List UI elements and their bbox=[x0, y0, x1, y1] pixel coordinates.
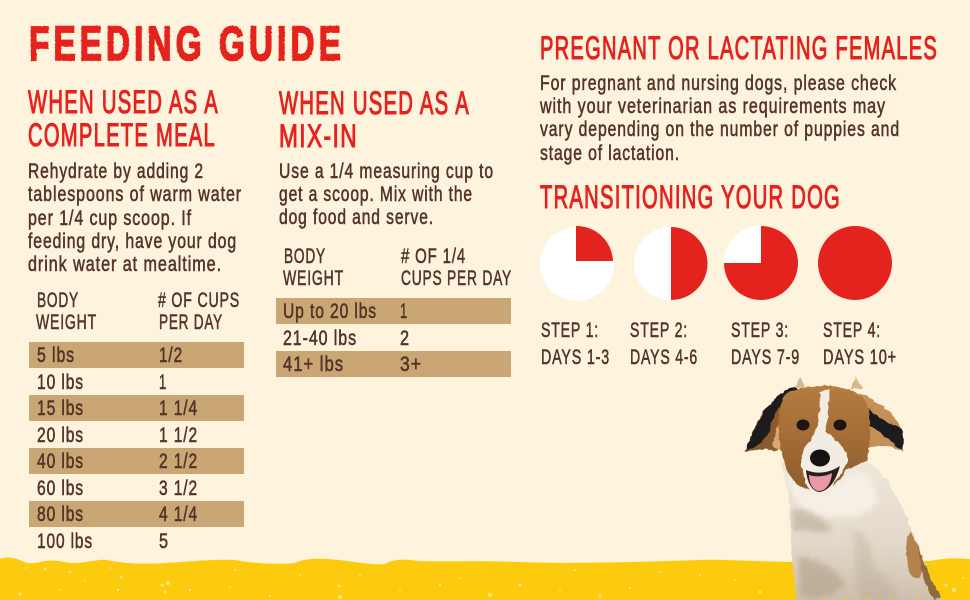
pie: step 3 bbox=[724, 226, 798, 300]
table: mix-in amounts: 2 bbox=[400, 327, 410, 350]
table: mix-in amounts: 21-40 lbs bbox=[283, 327, 357, 350]
table: mix-in amounts: 3+ bbox=[400, 353, 422, 376]
table: complete meal feeding amounts: 15 lbs bbox=[37, 397, 84, 420]
panel: pregnant or lactating females bbox=[539, 30, 938, 165]
table: complete meal feeding amounts: 100 lbs bbox=[37, 530, 93, 553]
table: mix-in amounts: # OF 1/4 bbox=[401, 245, 466, 268]
table: complete meal feeding amounts: 4 1/4 bbox=[159, 503, 198, 526]
text: complete meal instructions: drink water at mealtime. bbox=[28, 253, 222, 276]
mouth and tongue bbox=[806, 466, 840, 492]
text: mix-in instructions: Use a 1/4 measuring cup to bbox=[279, 160, 494, 183]
table: complete meal feeding amounts: 20 lbs bbox=[37, 424, 84, 447]
text: pregnant guidance: stage of lactation. bbox=[540, 142, 680, 165]
table: mix-in amounts bbox=[276, 245, 512, 377]
text: pregnant guidance bbox=[539, 72, 900, 165]
table: mix-in amounts: 41+ lbs bbox=[283, 353, 344, 376]
table: complete meal feeding amounts: 3 1/2 bbox=[159, 477, 198, 500]
chest fur bbox=[784, 470, 877, 517]
heading: when used as a complete meal: COMPLETE MEAL bbox=[28, 117, 216, 153]
text: mix-in instructions bbox=[279, 160, 494, 229]
nose bbox=[810, 450, 830, 466]
table: complete meal feeding amounts: BODY bbox=[37, 289, 79, 312]
table: mix-in amounts: CUPS PER DAY bbox=[401, 267, 512, 290]
table: complete meal feeding amounts: 1 bbox=[159, 371, 167, 394]
eyes bbox=[796, 420, 810, 430]
table: complete meal feeding amounts: 1 1/4 bbox=[159, 397, 198, 420]
step labels: DAYS 1-3 bbox=[541, 346, 610, 369]
table: mix-in amounts: BODY bbox=[284, 245, 326, 268]
step labels: DAYS 4-6 bbox=[630, 346, 698, 369]
table: complete meal feeding amounts: 5 lbs bbox=[37, 344, 75, 367]
panel: complete meal bbox=[28, 84, 244, 553]
heading: when used as a mix-in: MIX-IN bbox=[279, 118, 358, 154]
pie: step 1 bbox=[540, 226, 614, 301]
pie: step 4 bbox=[818, 226, 892, 300]
text: mix-in instructions: dog food and serve. bbox=[279, 206, 434, 229]
illustration: dog bbox=[745, 379, 942, 600]
step labels: DAYS 7-9 bbox=[731, 346, 800, 369]
heading: when used as a mix-in: WHEN USED AS A bbox=[279, 85, 470, 121]
title: FEEDING GUIDE bbox=[29, 18, 345, 71]
panel: transitioning your dog bbox=[540, 179, 897, 369]
panel: mix-in bbox=[276, 85, 512, 377]
table: mix-in amounts: WEIGHT bbox=[283, 267, 344, 290]
table: complete meal feeding amounts: 40 lbs bbox=[37, 450, 84, 473]
step labels: STEP 2: bbox=[630, 319, 688, 342]
table: complete meal feeding amounts: 5 bbox=[159, 530, 169, 553]
step labels: STEP 1: bbox=[541, 319, 599, 342]
text: mix-in instructions: get a scoop. Mix with the bbox=[279, 183, 473, 206]
table: complete meal feeding amounts bbox=[29, 289, 244, 553]
table: complete meal feeding amounts: PER DAY bbox=[159, 311, 223, 334]
table: complete meal feeding amounts: 1/2 bbox=[159, 344, 183, 367]
body bbox=[780, 456, 942, 600]
dog face details bbox=[796, 420, 846, 492]
table: complete meal feeding amounts: WEIGHT bbox=[36, 311, 97, 334]
step labels: DAYS 10+ bbox=[823, 346, 897, 369]
pie: step 2 bbox=[634, 227, 708, 300]
ear tufts bbox=[796, 379, 862, 390]
table: complete meal feeding amounts: 10 lbs bbox=[37, 371, 84, 394]
text: complete meal instructions bbox=[28, 160, 242, 276]
left ear bbox=[745, 386, 797, 451]
table: mix-in amounts: Up to 20 lbs bbox=[283, 300, 377, 323]
yellow wavy footer band bbox=[0, 558, 970, 600]
text: complete meal instructions: feeding dry, have your dog bbox=[28, 230, 237, 253]
text: complete meal instructions: per 1/4 cup scoop. If bbox=[28, 207, 192, 230]
step labels bbox=[541, 319, 897, 369]
step labels: STEP 3: bbox=[731, 319, 789, 342]
brown body patches bbox=[910, 533, 941, 600]
heading: when used as a mix-in bbox=[279, 85, 470, 154]
heading: when used as a complete meal: WHEN USED AS A bbox=[28, 84, 219, 120]
head bbox=[778, 386, 870, 491]
right ear bbox=[852, 392, 903, 452]
fur shading bbox=[792, 510, 900, 600]
blaze and muzzle bbox=[801, 389, 847, 494]
text: complete meal instructions: Rehydrate by adding 2 bbox=[28, 160, 204, 183]
table: complete meal feeding amounts: # OF CUPS bbox=[158, 289, 240, 312]
table: mix-in amounts: 1 bbox=[400, 300, 408, 323]
table: complete meal feeding amounts: 1 1/2 bbox=[159, 424, 198, 447]
table: complete meal feeding amounts: 2 1/2 bbox=[159, 450, 198, 473]
heading: when used as a complete meal bbox=[28, 84, 219, 153]
table: complete meal feeding amounts: 80 lbs bbox=[37, 503, 84, 526]
text: complete meal instructions: tablespoons of warm water bbox=[28, 183, 242, 206]
table: complete meal feeding amounts: 60 lbs bbox=[37, 477, 84, 500]
step labels: STEP 4: bbox=[823, 319, 881, 342]
